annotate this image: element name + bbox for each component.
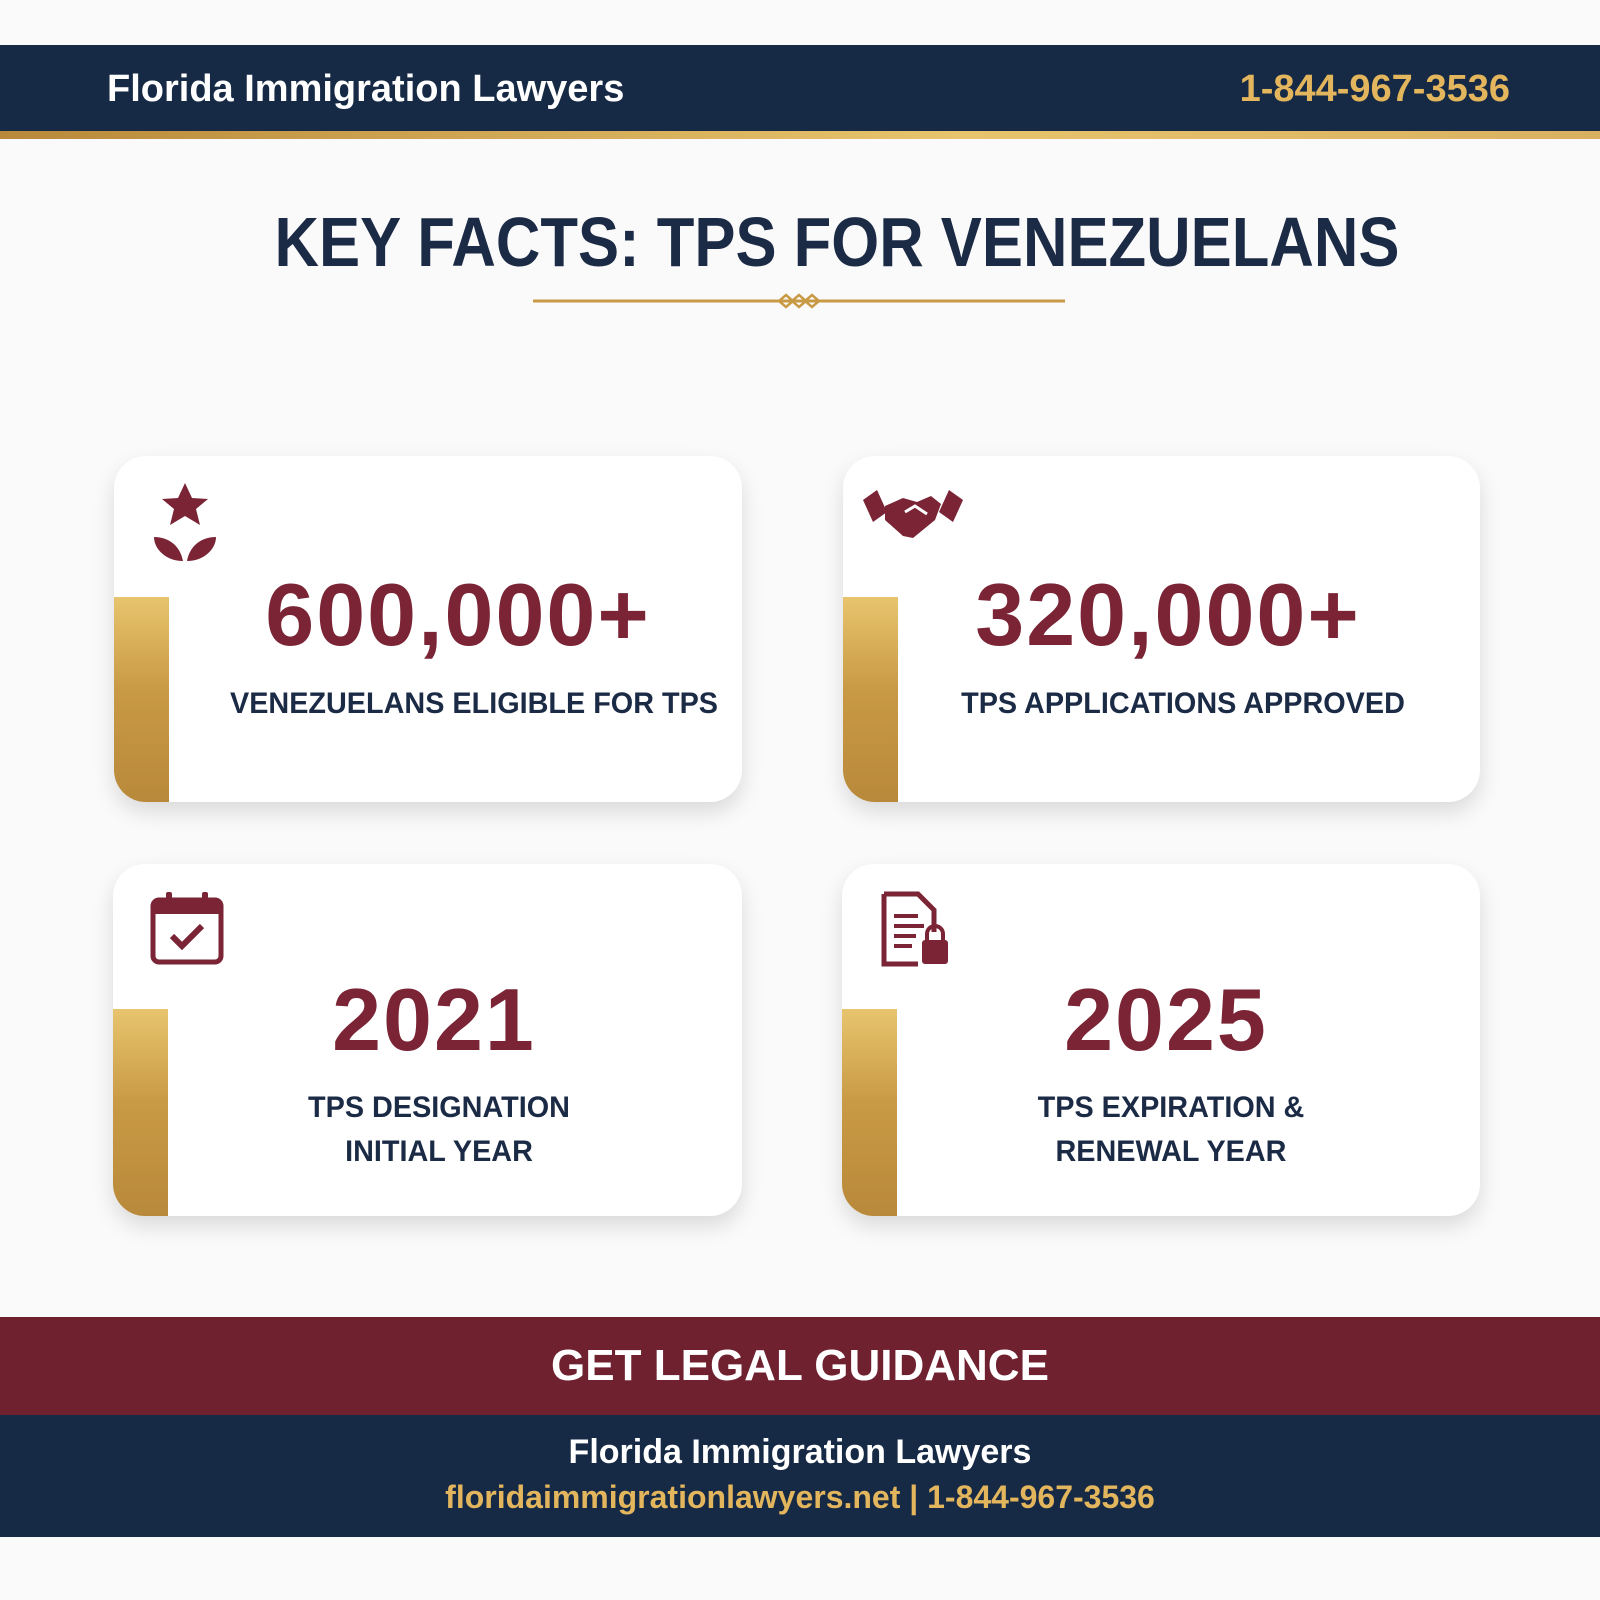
footer (0, 1415, 1600, 1537)
icon: handshake (863, 490, 963, 538)
number: 2021 (332, 970, 536, 1069)
header brand: Florida Immigration Lawyers (107, 68, 624, 110)
footer brand: Florida Immigration Lawyers (569, 1433, 1031, 1471)
icon: calendar check (150, 892, 224, 964)
label: TPS EXPIRATION & (1038, 1091, 1304, 1124)
header phone: 1-844-967-3536 (1240, 68, 1510, 110)
ornament (533, 294, 1065, 308)
footer contact: floridaimmigrationlawyers.net | 1-844-967-3536 (445, 1479, 1155, 1515)
card: 2021 (113, 864, 742, 1216)
label (1038, 1091, 1304, 1168)
label: INITIAL YEAR (345, 1135, 533, 1168)
card: 600,000+ (114, 456, 742, 802)
card: 320,000+ (843, 456, 1480, 802)
cta banner (0, 1317, 1600, 1415)
label: TPS DESIGNATION (308, 1091, 570, 1124)
cta banner: GET LEGAL GUIDANCE (551, 1341, 1049, 1390)
number: 2025 (1064, 970, 1268, 1069)
header bar (0, 45, 1600, 131)
card: 2025 (842, 864, 1480, 1216)
label: RENEWAL YEAR (1056, 1135, 1286, 1168)
gold rule (0, 131, 1600, 139)
number: 320,000+ (975, 565, 1361, 664)
icon: star with leaves (154, 483, 216, 561)
number: 600,000+ (265, 565, 651, 664)
title: KEY FACTS: TPS FOR VENEZUELANS (275, 203, 1399, 281)
icon: document lock (882, 892, 948, 966)
label (308, 1091, 570, 1168)
label: VENEZUELANS ELIGIBLE FOR TPS (230, 687, 718, 720)
label: TPS APPLICATIONS APPROVED (961, 687, 1405, 720)
